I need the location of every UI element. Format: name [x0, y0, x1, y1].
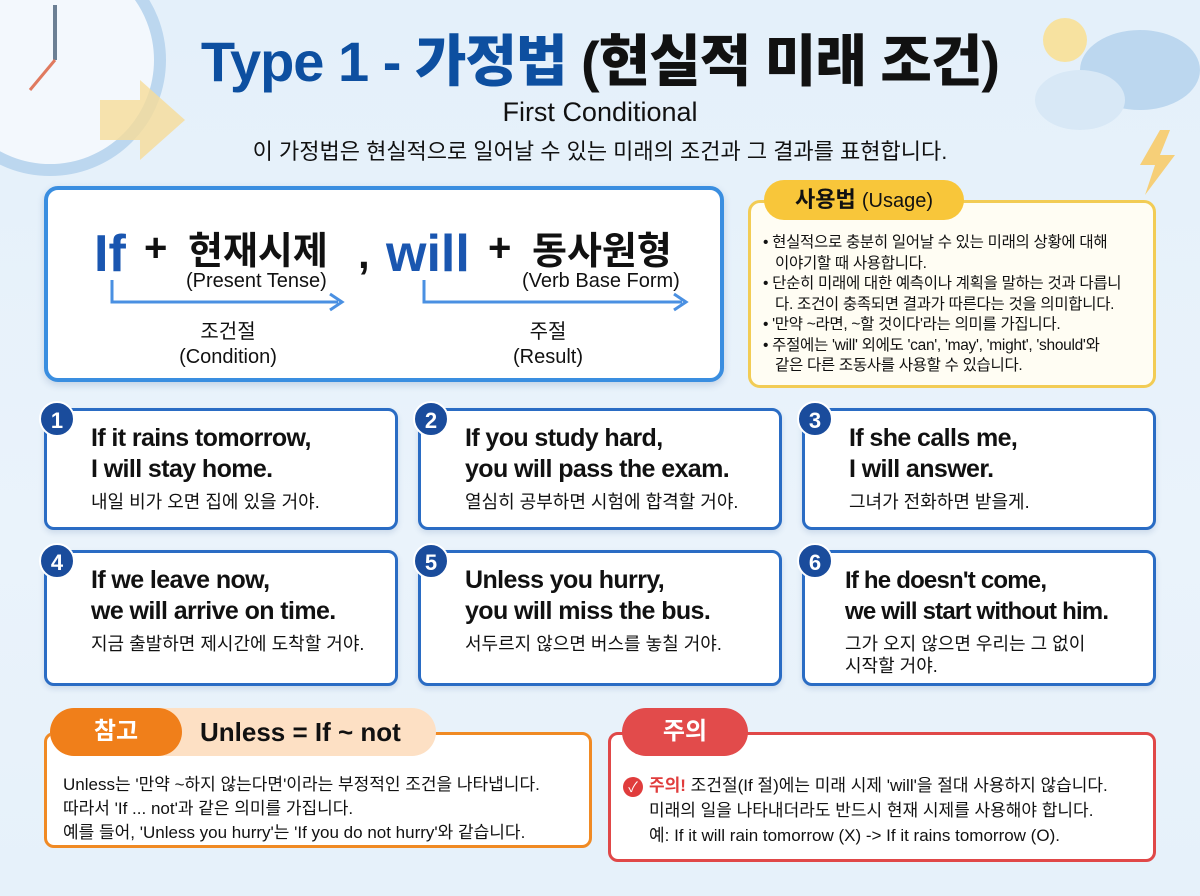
- panel: caution: 주의! 조건절(If 절)에는 미래 시제 'will'을 절대 사용하지 않습니다.: [649, 776, 1108, 795]
- formula text: (Present Tense): [186, 270, 327, 292]
- panel: usage: • '만약 ~라면, ~할 것이다'라는 의미를 가집니다.: [763, 316, 1060, 333]
- decoration: clock: [0, 0, 185, 176]
- arrows: [110, 280, 689, 312]
- tab: usage: [764, 180, 964, 220]
- card 1: I will stay home.: [91, 455, 273, 483]
- panel: usage: • 주절에는 'will' 외에도 'can', 'may', 'might', 'should'와: [763, 336, 1100, 354]
- subtitle: First Conditional: [502, 97, 698, 127]
- formula text: 동사원형: [532, 231, 672, 273]
- card 1: [44, 408, 398, 530]
- formula text: will: [386, 225, 470, 283]
- tab: note: Unless = If ~ not: [200, 717, 401, 747]
- card 3: If she calls me,: [849, 424, 1017, 452]
- formula text: ,: [358, 230, 370, 277]
- label: condition: [179, 321, 277, 368]
- panel: caution: 미래의 일을 나타내더라도 반드시 현재 시제를 사용해야 합니다.: [649, 801, 1093, 820]
- description: 이 가정법은 현실적으로 일어날 수 있는 미래의 조건과 그 결과를 표현합니다.: [253, 139, 947, 164]
- card 1: 1: [51, 408, 63, 433]
- title: Type 1 - 가정법 (현실적 미래 조건): [201, 30, 999, 93]
- tab: note: [50, 708, 436, 756]
- card 6: 그가 오지 않으면 우리는 그 없이: [845, 634, 1085, 654]
- panel: caution: [608, 732, 1156, 862]
- panel: formula: [44, 186, 724, 382]
- card 2: 열심히 공부하면 시험에 합격할 거야.: [465, 492, 738, 512]
- formula text: [94, 225, 680, 292]
- panel: note: [44, 732, 592, 848]
- card 4: [44, 550, 398, 686]
- tab: caution: 주의: [663, 718, 707, 745]
- label: result: (Result): [513, 346, 583, 368]
- card 5: 5: [425, 550, 437, 575]
- label: condition: 조건절: [200, 321, 256, 343]
- card 2: If you study hard,: [465, 424, 663, 452]
- card 3: 그녀가 전화하면 받을게.: [849, 492, 1030, 512]
- formula text: If: [94, 225, 126, 283]
- tab: usage: 사용법 (Usage): [795, 187, 933, 212]
- icon: check: [623, 777, 643, 797]
- card 6: we will start without him.: [845, 598, 1108, 625]
- card 6: 6: [809, 550, 821, 575]
- decoration: weather: [1035, 18, 1200, 195]
- card 5: 서두르지 않으면 버스를 놓칠 거야.: [465, 634, 722, 654]
- card 3: I will answer.: [849, 455, 993, 483]
- card 5: [418, 550, 782, 686]
- card 1: If it rains tomorrow,: [91, 424, 311, 452]
- card 2: you will pass the exam.: [465, 455, 729, 483]
- card 5: you will miss the bus.: [465, 597, 710, 625]
- card 4: 지금 출발하면 제시간에 도착할 거야.: [91, 634, 364, 654]
- icon: check: ✓: [628, 779, 638, 795]
- card 6: 시작할 거야.: [845, 656, 938, 676]
- card 4: we will arrive on time.: [91, 597, 336, 625]
- card 5: Unless you hurry,: [465, 566, 664, 594]
- panel: usage: • 현실적으로 충분히 일어날 수 있는 미래의 상황에 대해: [763, 234, 1107, 251]
- tab: caution: [622, 708, 748, 756]
- formula text: +: [144, 226, 167, 270]
- card 2: 2: [425, 408, 437, 433]
- label: condition: (Condition): [179, 346, 277, 368]
- card 6: [802, 550, 1156, 686]
- card 3: [802, 408, 1156, 530]
- panel: usage: 같은 다른 조동사를 사용할 수 있습니다.: [775, 357, 1022, 374]
- card 3: 3: [809, 408, 821, 433]
- panel: usage: 다. 조건이 충족되면 결과가 따른다는 것을 의미합니다.: [775, 296, 1114, 312]
- tab: note: 참고: [94, 718, 138, 745]
- panel: caution: 예: If it will rain tomorrow (X) -> If it rains tomorrow (O).: [649, 826, 1060, 845]
- label: result: [513, 321, 583, 368]
- panel: usage: • 단순히 미래에 대한 예측이나 계획을 말하는 것과 다릅니: [763, 275, 1121, 292]
- formula text: (Verb Base Form): [522, 270, 680, 292]
- panel: note: 따라서 'If ... not'과 같은 의미를 가집니다.: [63, 799, 353, 818]
- card 1: 내일 비가 오면 집에 있을 거야.: [91, 492, 320, 512]
- card 2: [418, 408, 782, 530]
- formula text: 현재시제: [188, 231, 328, 273]
- card 4: 4: [51, 550, 63, 575]
- label: result: 주절: [530, 321, 566, 343]
- panel: note: 예를 들어, 'Unless you hurry'는 'If you do not hurry'와 같습니다.: [63, 823, 525, 842]
- formula text: +: [488, 226, 511, 270]
- card 4: If we leave now,: [91, 566, 269, 594]
- card 6: If he doesn't come,: [845, 567, 1046, 594]
- panel: usage: 이야기할 때 사용합니다.: [775, 254, 927, 272]
- panel: usage: [748, 200, 1156, 388]
- panel: note: Unless는 '만약 ~하지 않는다면'이라는 부정적인 조건을 나타냅니다.: [63, 775, 540, 794]
